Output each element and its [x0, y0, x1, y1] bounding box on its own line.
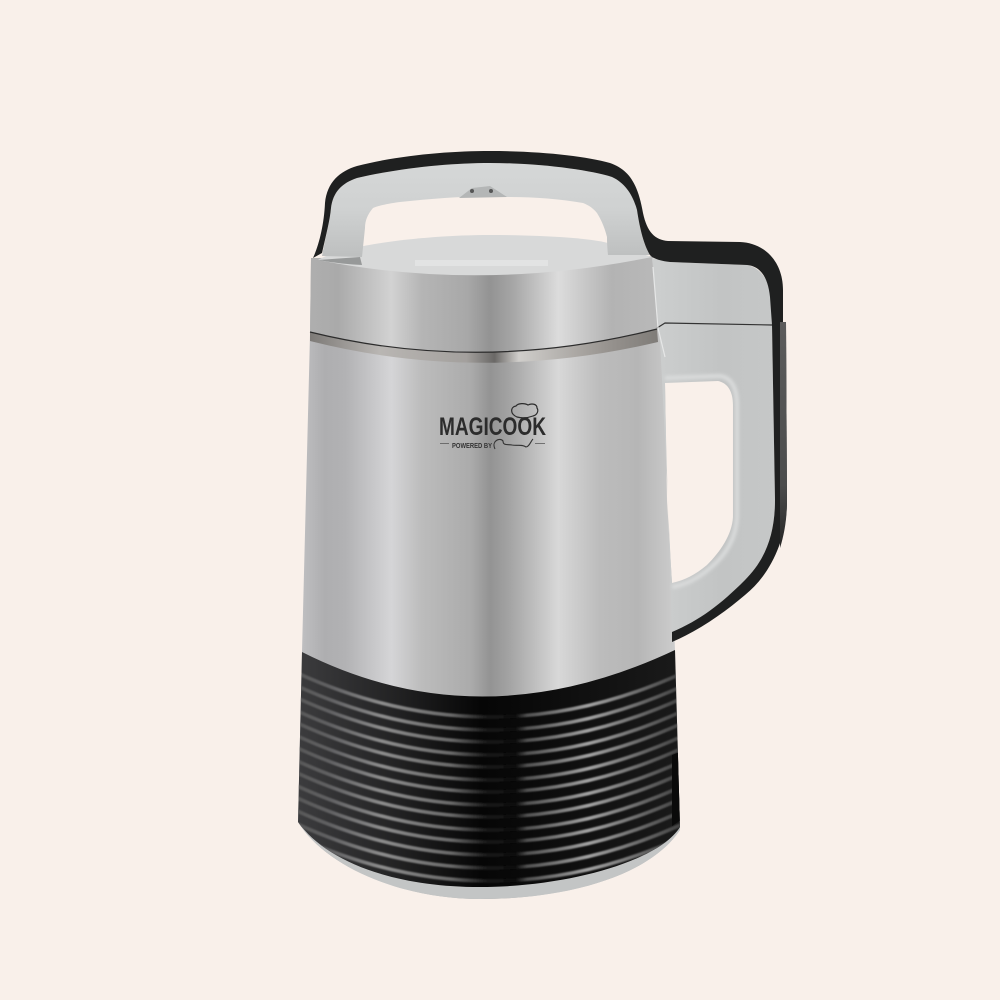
product photo: Magicook soy milk maker: [298, 151, 787, 899]
grip outer grey edge: [780, 322, 787, 548]
lower grey base ring: [298, 822, 680, 899]
kettle body: [298, 256, 680, 899]
lid top surface: [318, 235, 652, 275]
collar and main body: [298, 258, 680, 899]
ring shadow line: [310, 329, 657, 352]
handle grey shape: [652, 258, 775, 640]
brand name: MAGICOOK: [439, 413, 546, 441]
tagline rules: [440, 442, 545, 444]
ribbed black base: [298, 650, 680, 887]
jug handle: [652, 258, 775, 640]
carry handle: [322, 163, 650, 257]
logo: [439, 404, 546, 450]
powered by tagline: POWERED BY: [452, 441, 492, 450]
signature: [494, 439, 533, 449]
metal trim ring: [310, 329, 658, 363]
body to handle joint highlight: [653, 267, 665, 357]
lid collar: [310, 256, 658, 353]
handle seam: [657, 323, 772, 328]
carry handle grey band: [322, 163, 650, 257]
black handle strip: [313, 151, 787, 642]
carry handle rivets: [459, 186, 507, 198]
handle inner bevel: [665, 376, 737, 587]
side switch: [672, 752, 680, 826]
ribs: [295, 672, 685, 881]
lid label panel: [415, 260, 548, 266]
lid rim reflection: [318, 257, 362, 265]
chef hat icon: [512, 404, 538, 418]
